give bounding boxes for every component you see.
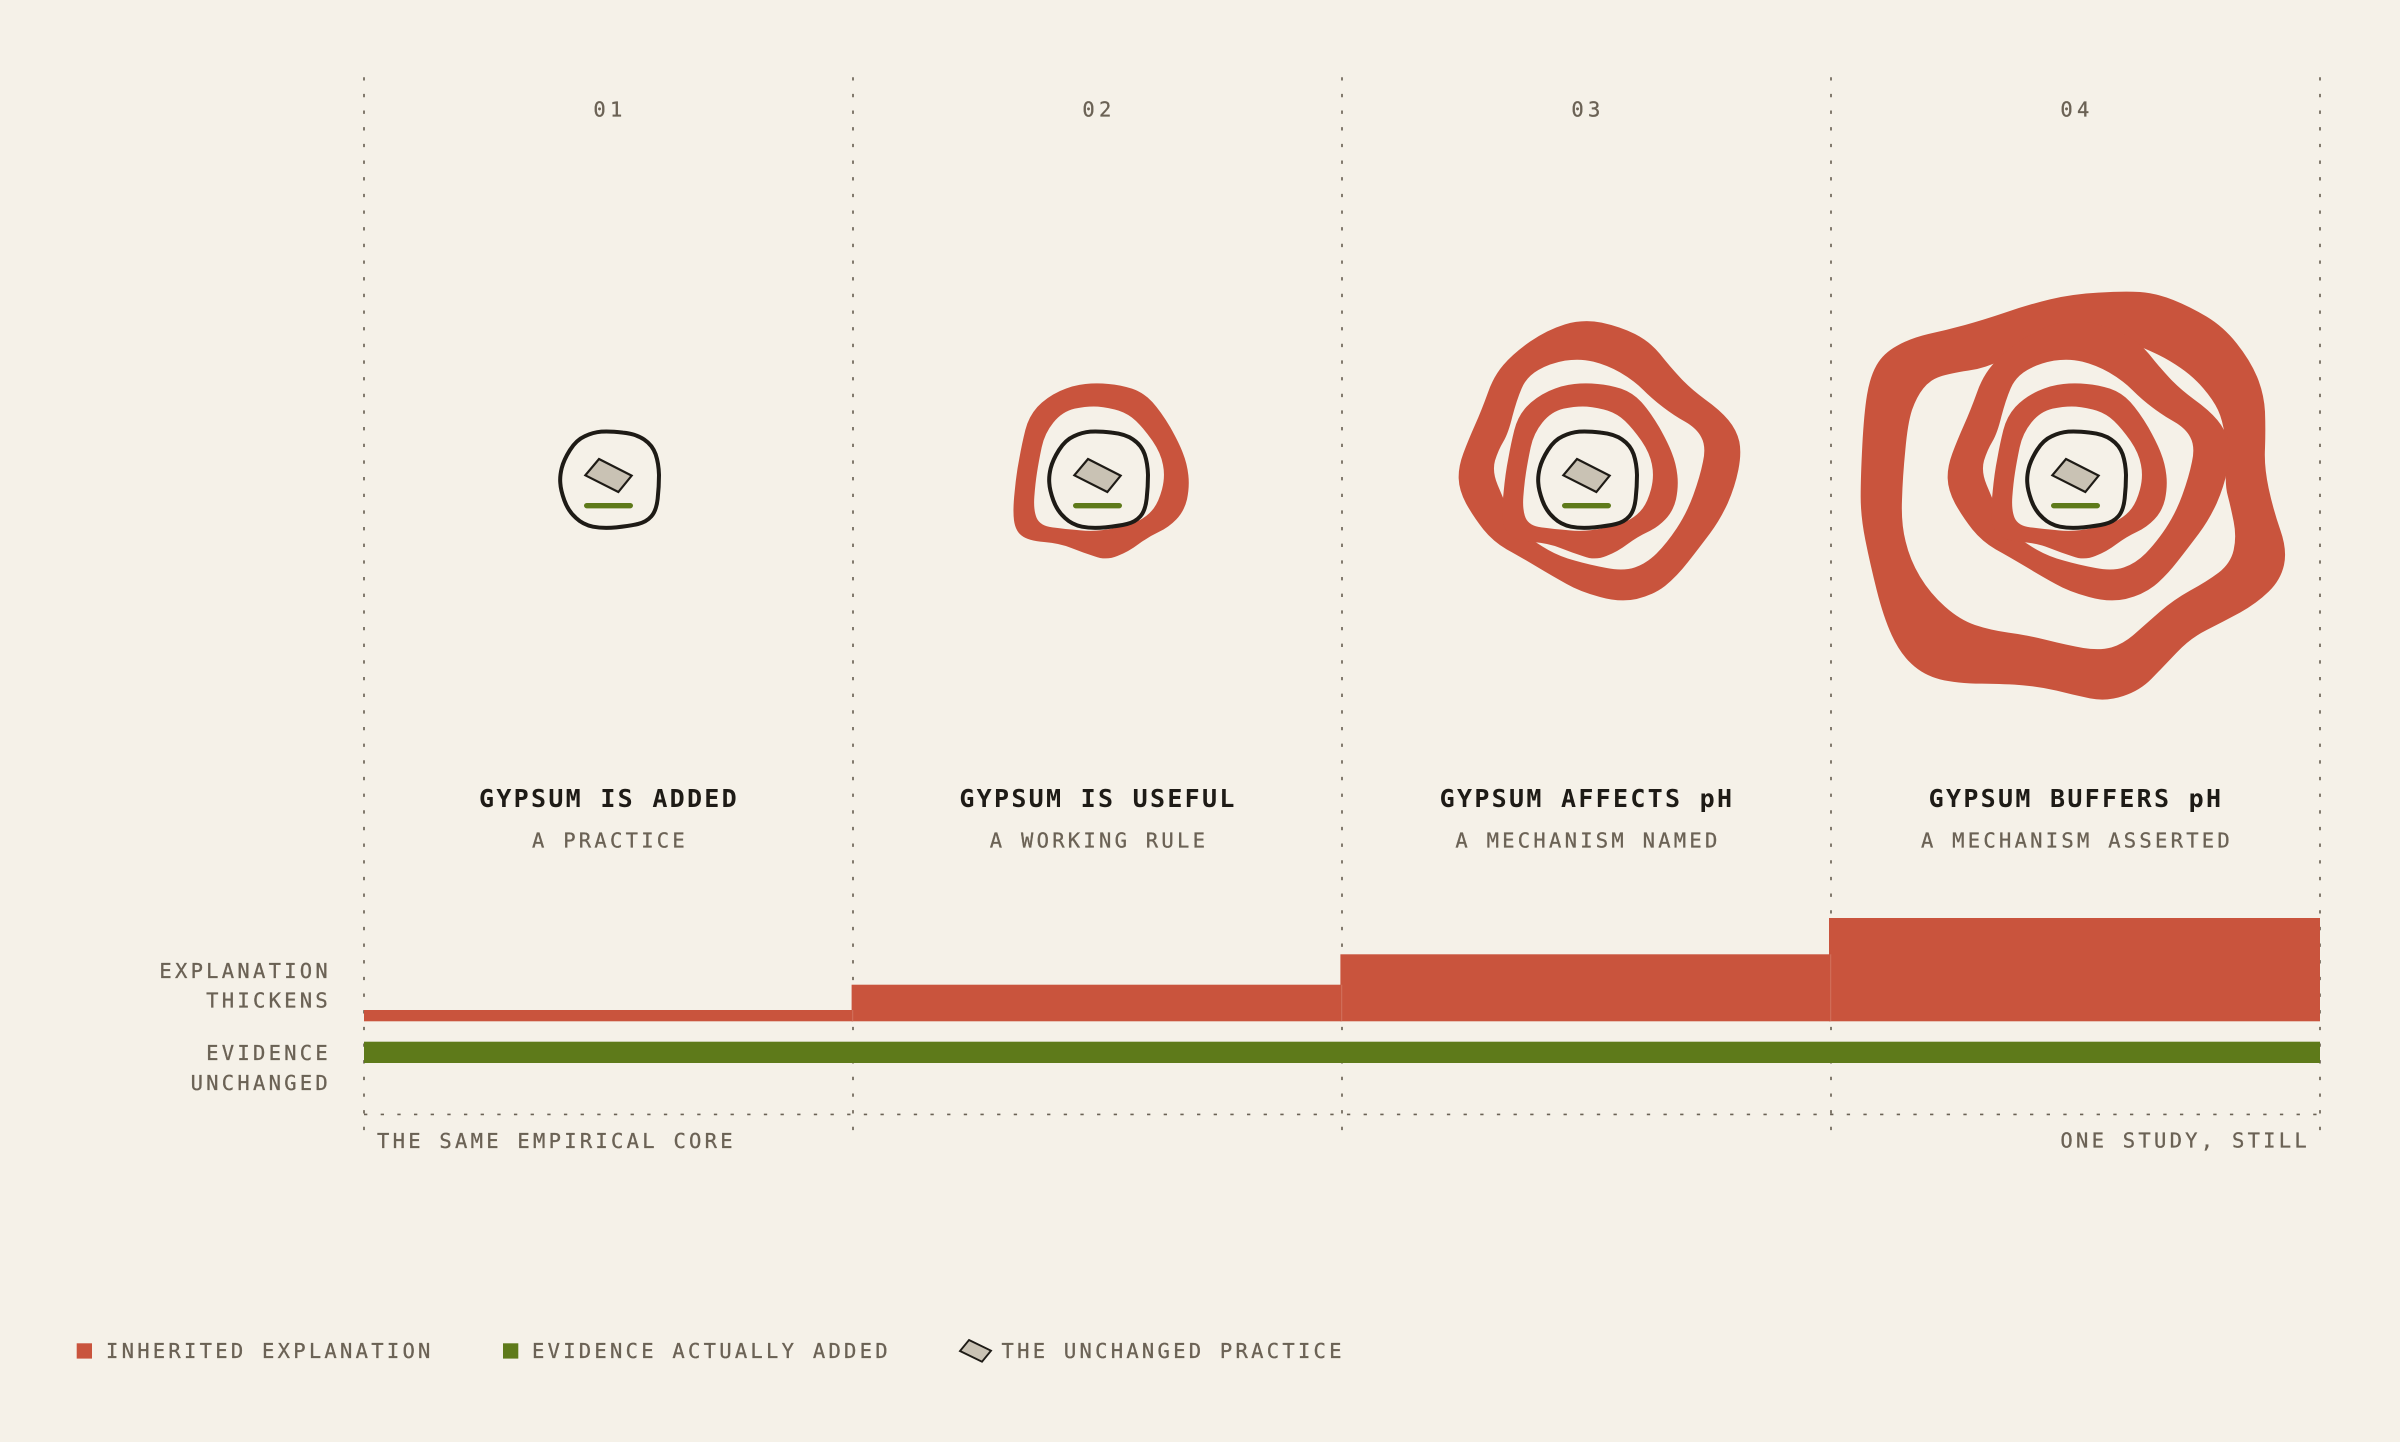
step number 02: 02	[1082, 98, 1116, 122]
panel: stage 3, gypsum affects pH	[1440, 98, 1740, 852]
icon: core with one explanation ring	[1013, 383, 1189, 558]
legend label: inherited explanation: INHERITED EXPLANATION	[106, 1339, 434, 1363]
step number 01: 01	[593, 98, 627, 122]
step number 04: 04	[2060, 98, 2094, 122]
heading: gypsum affects pH: GYPSUM AFFECTS pH	[1440, 784, 1734, 813]
legend icon: unchanged practice	[960, 1340, 991, 1362]
step number 03: 03	[1571, 98, 1605, 122]
icon: core with three explanation rings	[1861, 292, 2285, 700]
subheading: a mechanism named: A MECHANISM NAMED	[1455, 828, 1721, 852]
icon: bare practice core	[560, 431, 659, 528]
legend swatch: evidence actually added	[503, 1343, 518, 1359]
chart: explanation thickness step bars	[364, 918, 2320, 1021]
panel: stage 1, gypsum is added	[479, 98, 739, 852]
row label: explanation thickens	[159, 959, 331, 1013]
legend label: the unchanged practice: THE UNCHANGED PRACTICE	[1002, 1339, 1345, 1363]
panel: stage 2, gypsum is useful	[959, 98, 1237, 852]
legend	[77, 1339, 1345, 1363]
heading: gypsum buffers pH: GYPSUM BUFFERS pH	[1929, 784, 2223, 813]
panel: stage 4, gypsum buffers pH	[1861, 98, 2285, 852]
row label: evidence unchanged: EVIDENCE	[206, 1041, 331, 1065]
subheading: a practice: A PRACTICE	[532, 828, 688, 852]
icon: core with two explanation rings	[1459, 321, 1740, 600]
legend label: evidence actually added: EVIDENCE ACTUALLY ADDED	[532, 1339, 891, 1363]
row label: explanation thickens: EXPLANATION	[159, 959, 331, 983]
legend swatch: inherited explanation	[77, 1343, 92, 1359]
chart: constant evidence bar	[364, 1042, 2320, 1063]
caption: the same empirical core: THE SAME EMPIRICAL CORE	[377, 1129, 736, 1153]
row label: evidence unchanged	[191, 1041, 331, 1095]
row label: evidence unchanged: UNCHANGED	[191, 1071, 331, 1095]
caption: one study, still: ONE STUDY, STILL	[2060, 1128, 2310, 1152]
heading: gypsum is useful: GYPSUM IS USEFUL	[959, 784, 1237, 813]
subheading: a mechanism asserted: A MECHANISM ASSERTED	[1921, 828, 2233, 852]
heading: gypsum is added: GYPSUM IS ADDED	[479, 784, 739, 813]
subheading: a working rule: A WORKING RULE	[990, 828, 1208, 852]
row label: explanation thickens: THICKENS	[206, 989, 331, 1013]
